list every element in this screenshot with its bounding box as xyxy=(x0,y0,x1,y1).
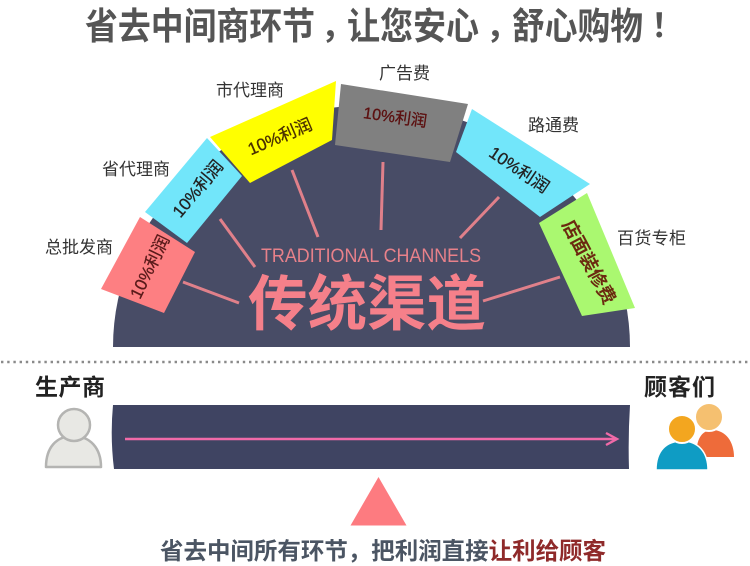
title: 让您安心 xyxy=(347,6,479,47)
arrow xyxy=(125,433,617,445)
bottom caption: 省去中间所有环节，把利润直接让利给顾客 xyxy=(160,537,606,564)
segment: gray xyxy=(335,84,468,162)
label: 总批发商: 总批发商 xyxy=(45,238,113,257)
segment: cyan left xyxy=(145,138,242,243)
callout lines xyxy=(183,162,560,303)
label: 生产商: 生产商 xyxy=(35,374,105,400)
label: 顾客们: 顾客们 xyxy=(644,374,715,400)
title xyxy=(85,6,684,47)
english heading: TRADITIONAL CHANNELS xyxy=(261,246,481,267)
icon: producer xyxy=(46,409,101,467)
segment: cyan right xyxy=(456,109,590,217)
segment: gray: 10%利润 xyxy=(362,104,428,131)
segment: cyan left: 10%利润 xyxy=(169,157,227,221)
semicircle: traditional channels xyxy=(113,105,630,347)
title: 省去中间商环节 xyxy=(85,6,315,47)
label: 路通费: 路通费 xyxy=(528,116,579,135)
chinese heading: 传统渠道 xyxy=(248,271,486,338)
title: ， xyxy=(486,8,519,45)
segment: yellow xyxy=(210,81,336,183)
segment: red: 10%利润 xyxy=(127,232,173,302)
label: 广告费: 广告费 xyxy=(379,64,430,83)
label: 市代理商: 市代理商 xyxy=(216,81,284,100)
title: ， xyxy=(321,8,354,45)
segment: green: 店面装修费 xyxy=(558,216,620,308)
label: 百货专柜: 百货专柜 xyxy=(617,229,686,248)
channel bar xyxy=(112,405,630,469)
label: 省代理商: 省代理商 xyxy=(102,160,170,179)
segment: yellow: 10%利润 xyxy=(245,115,315,159)
segment: cyan right: 10%利润 xyxy=(485,143,553,197)
icon: customers xyxy=(656,403,734,470)
title: ！ xyxy=(651,7,684,44)
title: 舒心购物 xyxy=(512,6,643,47)
segment: red xyxy=(101,217,195,313)
segment: green xyxy=(539,193,635,316)
triangle pointer xyxy=(350,477,406,526)
